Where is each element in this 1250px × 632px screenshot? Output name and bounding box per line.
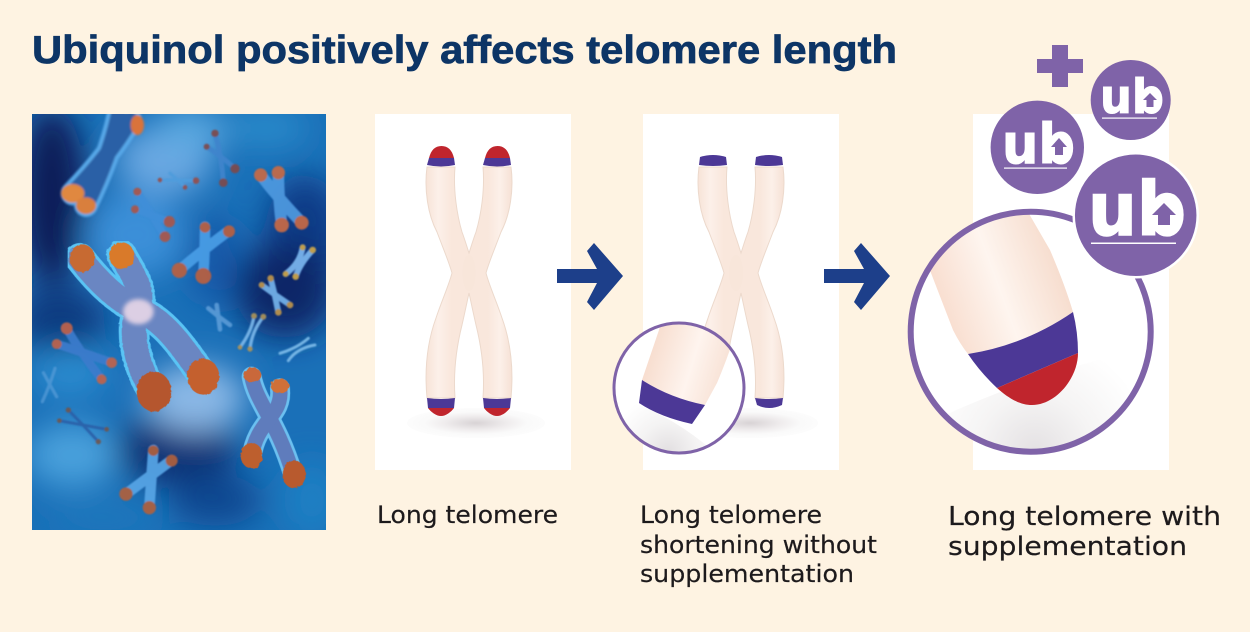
panel: supplemented telomere (911, 114, 1169, 470)
icon: ub badge medium (991, 101, 1084, 194)
label: shortening without supplementation: supplementation (640, 560, 854, 588)
photo: chromosomes in blue microscopic view (32, 114, 326, 530)
label: with supplementation: supplementation (948, 532, 1187, 562)
main chromosome (70, 242, 219, 412)
magnifier lens (908, 208, 1154, 455)
lower-right chromosome (241, 368, 306, 488)
title: Ubiquinol positively affects telomere length (32, 29, 897, 72)
arrow: second (824, 243, 890, 310)
icon: ub badge medium: ub (1002, 112, 1075, 176)
chromosome (426, 146, 512, 416)
icon: ub badge small (1091, 60, 1171, 140)
icon: plus (1037, 45, 1083, 87)
floor shadow (682, 408, 818, 438)
telomere caps (699, 155, 783, 408)
panel: shortened telomere (610, 114, 839, 470)
arrow: first (557, 243, 623, 310)
top-left blurred chromosome (61, 115, 144, 214)
label: shortening without supplementation: shortening without (640, 531, 877, 559)
chromosome (698, 155, 784, 408)
telomere caps (427, 146, 511, 416)
icon: ub badge small: ub (1100, 70, 1164, 125)
floor shadow (407, 408, 545, 438)
label: with supplementation (948, 502, 1221, 562)
panel: long telomere (375, 114, 571, 470)
label: shortening without supplementation (640, 501, 877, 588)
magnifier lens (612, 322, 746, 454)
icon: ub badge large: ub (1088, 167, 1186, 253)
label: with supplementation: Long telomere with (948, 502, 1221, 532)
far small chromosomes (42, 130, 316, 514)
label: shortening without supplementation: Long telomere (640, 501, 822, 529)
icon: ub badge large (1074, 153, 1198, 277)
label: long telomere: Long telomere (377, 501, 558, 529)
